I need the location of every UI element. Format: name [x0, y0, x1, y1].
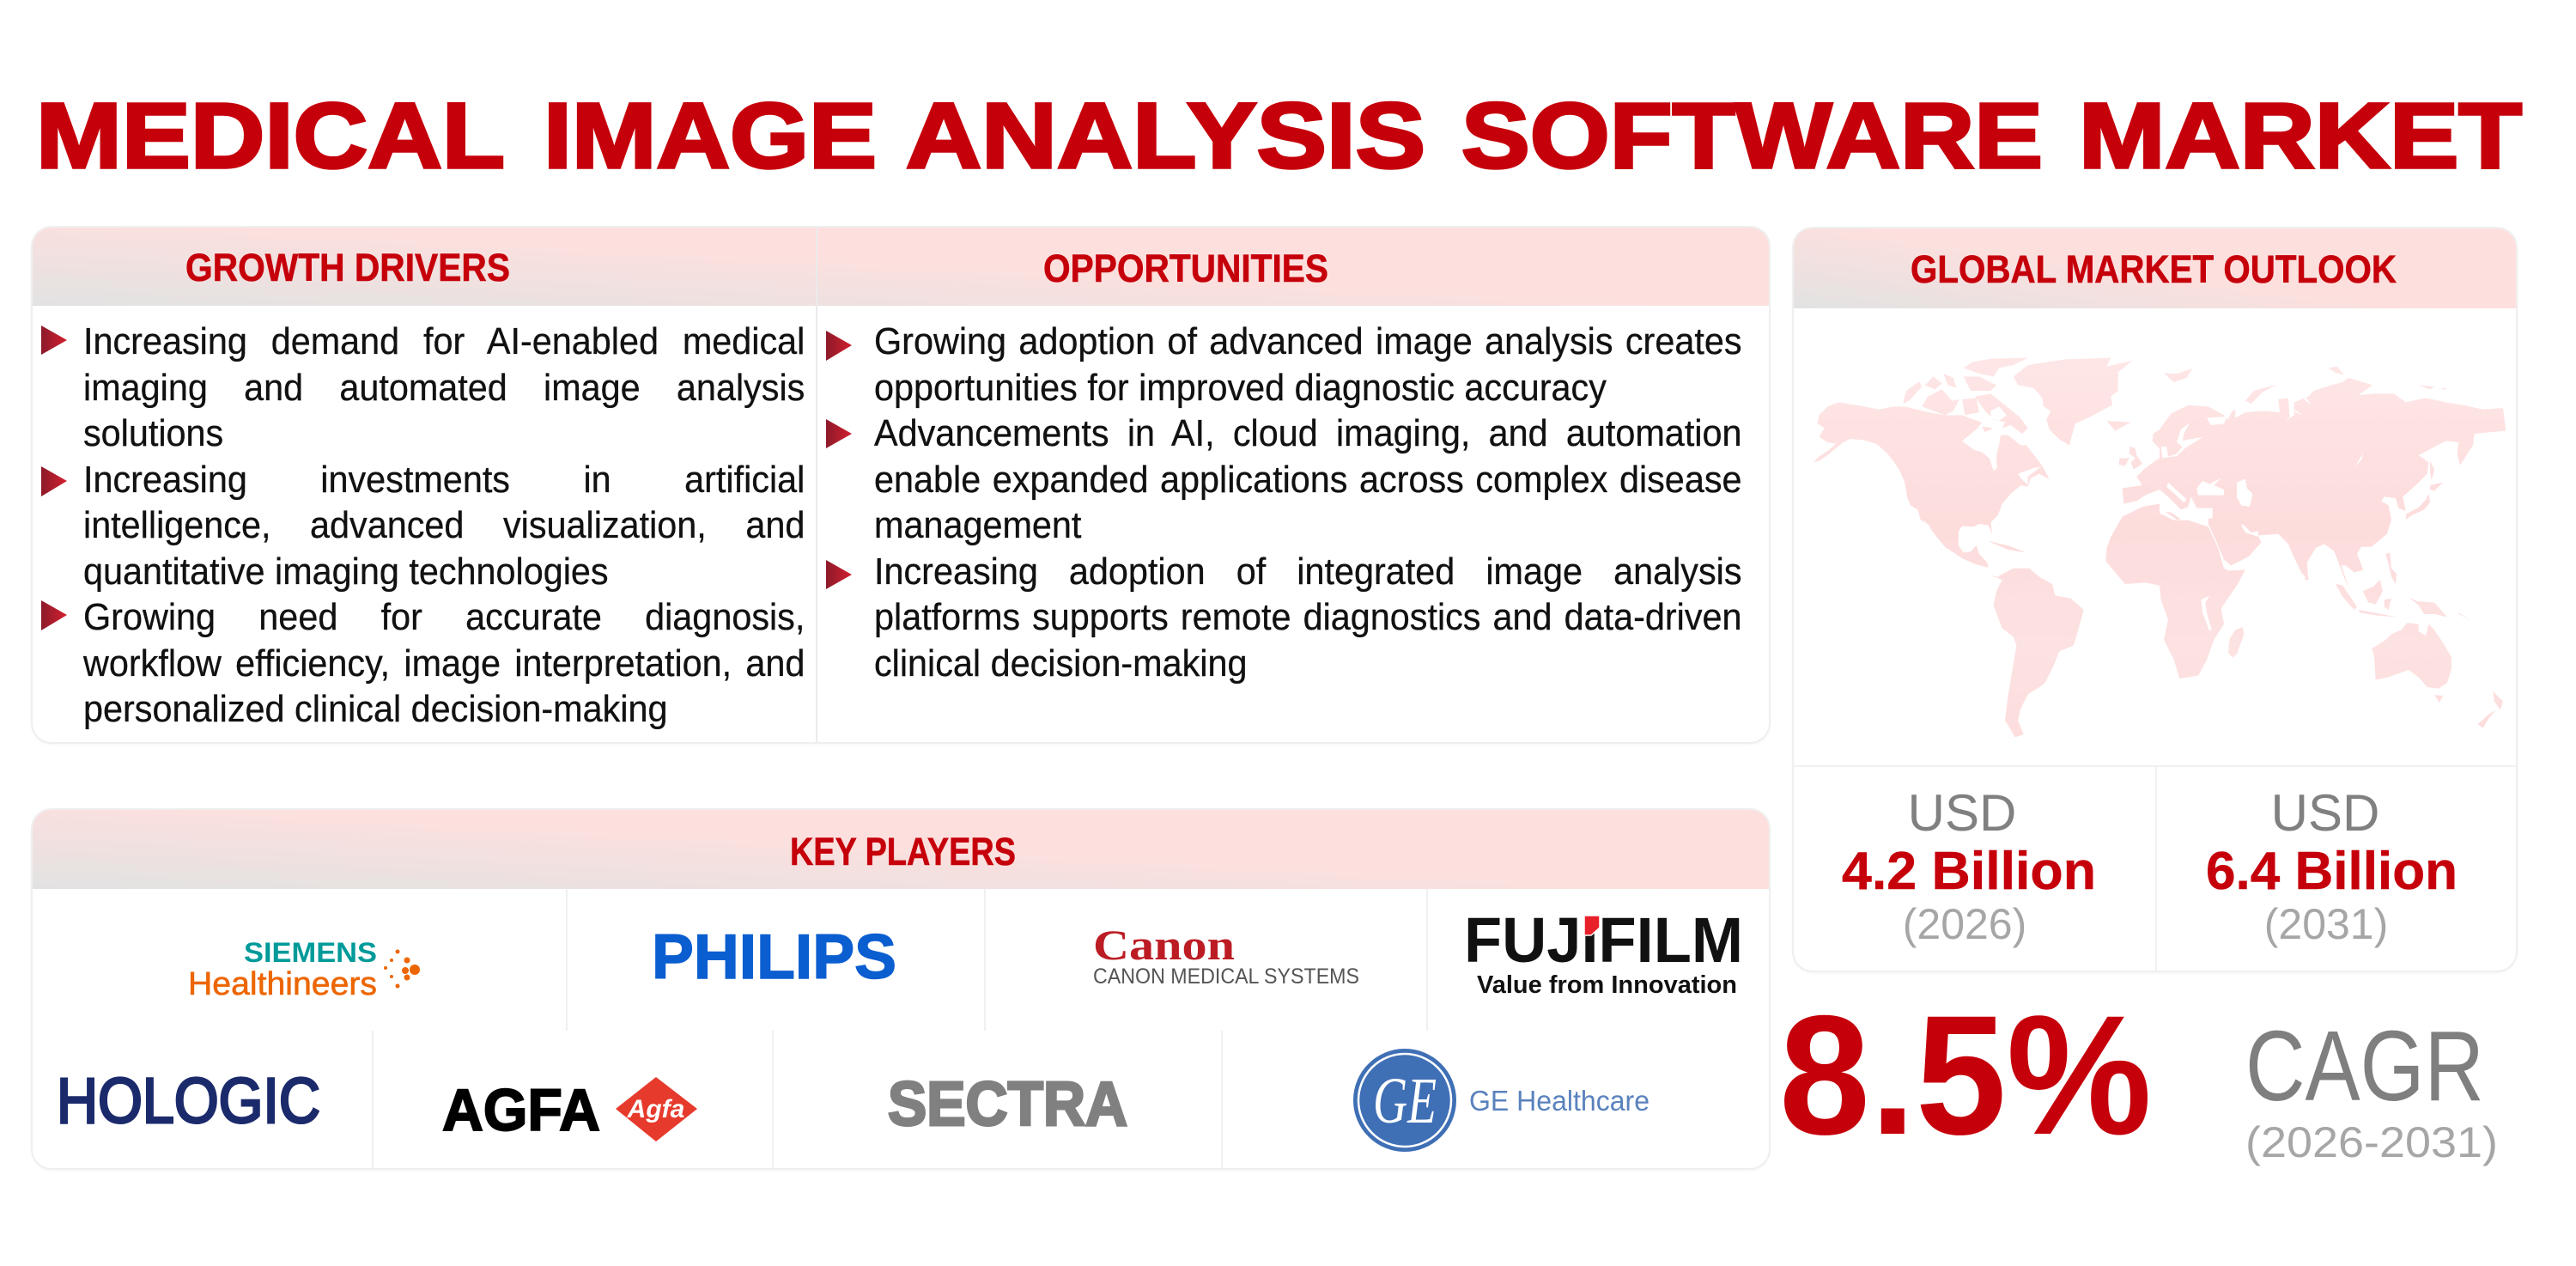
text: opportunity 1: opportunities for improved diagnostic accuracy	[874, 366, 1607, 409]
text: opportunity 2: Advancements in AI, cloud imaging, and automation	[874, 412, 1741, 454]
text: driver 2: quantitative imaging technologies	[83, 550, 609, 593]
text: driver 1: Increasing demand for AI-enabled medical	[83, 320, 805, 362]
column: opportunities	[817, 228, 1769, 684]
CAGR label: CAGR	[2245, 1010, 2484, 1122]
heading: growth drivers: GROWTH DRIVERS	[185, 246, 510, 289]
heading band: key players	[33, 810, 1769, 889]
logo: GE Healthcare: GE Healthcare	[1469, 1085, 1649, 1117]
heading: opportunities: OPPORTUNITIES	[1043, 247, 1328, 290]
text: driver 1: imaging and automated image analysis	[83, 366, 805, 409]
bullet icons: opportunities	[826, 331, 852, 589]
title: SOFTWARE	[1461, 83, 2043, 187]
panel: key players	[33, 810, 1769, 1168]
column: growth drivers	[33, 228, 817, 742]
heading band: growth drivers	[33, 228, 816, 306]
text: opportunity 3: Increasing adoption of integrated image analysis	[874, 550, 1741, 593]
statistic: 2026 market size: (2026)	[1903, 900, 2026, 948]
text: opportunity 3	[874, 550, 1741, 684]
title: MARKET	[2079, 83, 2522, 187]
logo: Philips: PHILIPS	[652, 922, 896, 992]
text: opportunity 3: clinical decision-making	[874, 642, 1247, 684]
logo: Siemens Healthineers	[188, 937, 420, 1002]
text: opportunity 2: enable expanded applications across complex disease	[874, 459, 1741, 500]
map and statistics	[1794, 357, 2516, 971]
text: opportunity 1: Growing adoption of advanced image analysis creates	[874, 320, 1741, 362]
title	[36, 83, 2523, 187]
text: opportunity 2	[874, 412, 1741, 546]
heading band: global market outlook	[1794, 228, 2516, 308]
logo: Canon Medical Systems: CANON MEDICAL SYSTEMS	[1093, 965, 1359, 989]
text: driver 2: Increasing investments in artificial	[83, 459, 805, 500]
statistic: 2031 market size: 6.4 Billion	[2206, 842, 2458, 901]
statistic: 2031 market size: USD	[2271, 784, 2379, 842]
world map	[1814, 358, 2506, 737]
text: driver 3: personalized clinical decision-making	[83, 688, 667, 730]
heading: global market outlook: GLOBAL MARKET OUTLOOK	[1911, 247, 2397, 291]
text: driver 1: solutions	[83, 412, 223, 454]
statistic: 2026 market size	[1842, 784, 2096, 948]
logo: Fujifilm: Value from Innovation	[1477, 971, 1737, 999]
title: ANALYSIS	[906, 83, 1425, 187]
text: driver 3: Growing need for accurate diagnosis,	[83, 596, 805, 638]
statistic: 2031 market size: (2031)	[2264, 900, 2388, 948]
logo: Agfa: Agfa	[627, 1095, 684, 1123]
logo: Hologic: HOLOGIC	[57, 1065, 320, 1136]
logo: Siemens Healthineers: SIEMENS	[244, 937, 377, 968]
bullet icons: growth drivers	[41, 326, 67, 630]
panel: growth drivers and opportunities	[33, 228, 1769, 742]
title: MEDICAL	[36, 83, 505, 187]
logo: Canon Medical Systems: Canon	[1093, 921, 1235, 969]
CAGR value: 8.5%	[1779, 980, 2152, 1170]
logo: Sectra: SECTRA	[888, 1070, 1127, 1139]
title: IMAGE	[544, 83, 877, 187]
statistic: 2031 market size	[2206, 784, 2458, 948]
text: driver 1	[83, 320, 805, 454]
logo: Canon Medical Systems	[1093, 921, 1359, 989]
text: driver 3	[82, 596, 805, 730]
logo grid	[57, 889, 1743, 1168]
logo: Agfa: AGFA	[442, 1077, 600, 1143]
text: driver 2: intelligence, advanced visualization, and	[83, 504, 805, 546]
logo: Siemens Healthineers: Healthineers	[188, 966, 377, 1002]
logo: Agfa	[442, 1077, 697, 1143]
CAGR label: (2026-2031)	[2245, 1118, 2498, 1166]
heading band: opportunities	[817, 228, 1769, 306]
text: opportunity 1	[874, 320, 1741, 409]
statistic: 2026 market size: USD	[1908, 784, 2016, 842]
text: driver 3: workflow efficiency, image interpretation, and	[83, 642, 805, 684]
text: opportunity 3: platforms supports remote diagnostics and data-driven	[874, 596, 1741, 638]
CAGR label	[2245, 1010, 2498, 1166]
logo: Fujifilm: FUJIFILM	[1464, 904, 1743, 976]
logo: GE Healthcare	[1353, 1049, 1649, 1152]
statistic: 2026 market size: 4.2 Billion	[1842, 842, 2096, 901]
logo: GE Healthcare: GE	[1373, 1065, 1437, 1137]
text: driver 2	[83, 459, 805, 593]
panel: global market outlook	[1794, 228, 2516, 971]
heading: key players: KEY PLAYERS	[790, 830, 1016, 873]
text: opportunity 2: management	[874, 504, 1081, 546]
